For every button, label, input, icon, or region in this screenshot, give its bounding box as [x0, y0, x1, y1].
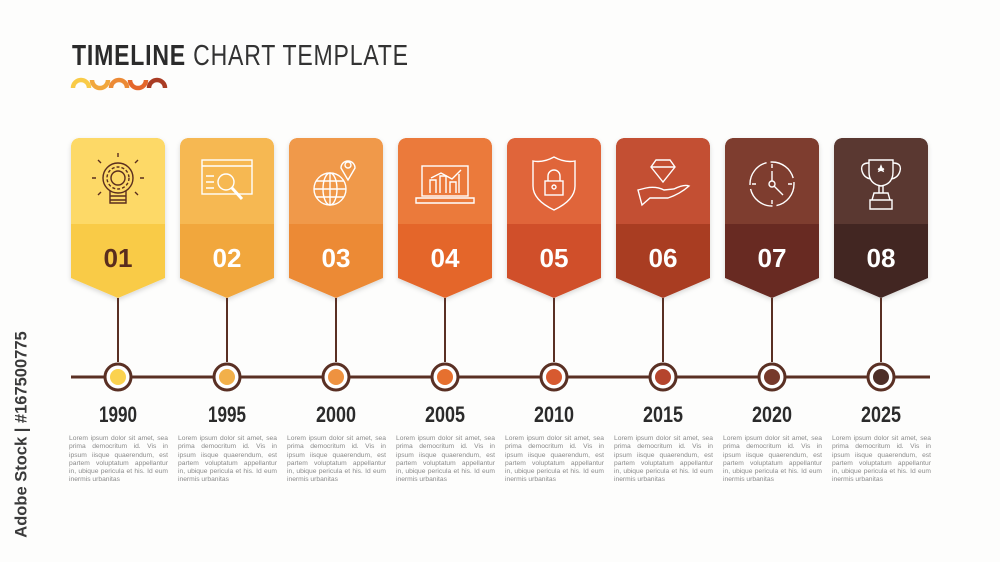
card 02: 02	[212, 243, 242, 273]
card 08	[834, 138, 928, 427]
card 01	[71, 138, 165, 427]
icon: trophy	[862, 160, 900, 209]
card 04: 04	[430, 243, 460, 273]
card 07: 2020	[752, 402, 792, 427]
side credit: Adobe Stock | #167500775	[12, 331, 30, 538]
text block 2: Lorem ipsum dolor sit amet, sea prima democritum id. Vis in ipsum iisque quaerendum, est partem voluptatum appellantur in, ubique pericula et his. Id eum inermis urbanitas	[178, 435, 277, 483]
text block 4: Lorem ipsum dolor sit amet, sea prima democritum id. Vis in ipsum iisque quaerendum, est partem voluptatum appellantur in, ubique pericula et his. Id eum inermis urbanitas	[396, 435, 495, 483]
title: TIMELINE CHART TEMPLATE	[72, 40, 409, 72]
text block 6: Lorem ipsum dolor sit amet, sea prima democritum id. Vis in ipsum iisque quaerendum, est partem voluptatum appellantur in, ubique pericula et his. Id eum inermis urbanitas	[614, 435, 713, 483]
card 05	[507, 138, 601, 427]
card 07: 07	[758, 243, 786, 273]
text block 3: Lorem ipsum dolor sit amet, sea prima democritum id. Vis in ipsum iisque quaerendum, est partem voluptatum appellantur in, ubique pericula et his. Id eum inermis urbanitas	[287, 435, 386, 483]
card 06: 06	[648, 243, 678, 273]
icon: browser search	[202, 160, 252, 199]
icon: shield lock	[533, 157, 575, 210]
title decoration: wave	[70, 78, 168, 90]
card 03: 2000	[316, 402, 356, 427]
card 04: 2005	[425, 402, 465, 427]
card 03: 03	[322, 243, 350, 273]
icon: globe pin	[314, 161, 355, 205]
card 08: 2025	[861, 402, 901, 427]
card 02: 1995	[208, 402, 246, 427]
text block 1: Lorem ipsum dolor sit amet, sea prima democritum id. Vis in ipsum iisque quaerendum, est partem voluptatum appellantur in, ubique pericula et his. Id eum inermis urbanitas	[69, 435, 168, 483]
card 04	[398, 138, 492, 427]
card 03	[289, 138, 383, 427]
card 02	[180, 138, 274, 427]
timeline axis	[71, 376, 930, 378]
icon: hand diamond	[638, 160, 689, 205]
text block 5: Lorem ipsum dolor sit amet, sea prima democritum id. Vis in ipsum iisque quaerendum, est partem voluptatum appellantur in, ubique pericula et his. Id eum inermis urbanitas	[505, 435, 604, 483]
text block 7: Lorem ipsum dolor sit amet, sea prima democritum id. Vis in ipsum iisque quaerendum, est partem voluptatum appellantur in, ubique pericula et his. Id eum inermis urbanitas	[723, 435, 822, 483]
icon: clock	[750, 162, 794, 206]
card 06	[616, 138, 710, 427]
card 07	[725, 138, 819, 427]
text block 8: Lorem ipsum dolor sit amet, sea prima democritum id. Vis in ipsum iisque quaerendum, est partem voluptatum appellantur in, ubique pericula et his. Id eum inermis urbanitas	[832, 435, 931, 483]
card 05: 05	[540, 243, 568, 273]
card 08: 08	[866, 243, 896, 273]
card 01: 01	[104, 243, 132, 273]
icon: bulb gear	[92, 153, 144, 203]
card 05: 2010	[534, 402, 574, 427]
card 01: 1990	[99, 402, 137, 427]
card 06: 2015	[643, 402, 683, 427]
icon: laptop chart	[416, 166, 474, 203]
